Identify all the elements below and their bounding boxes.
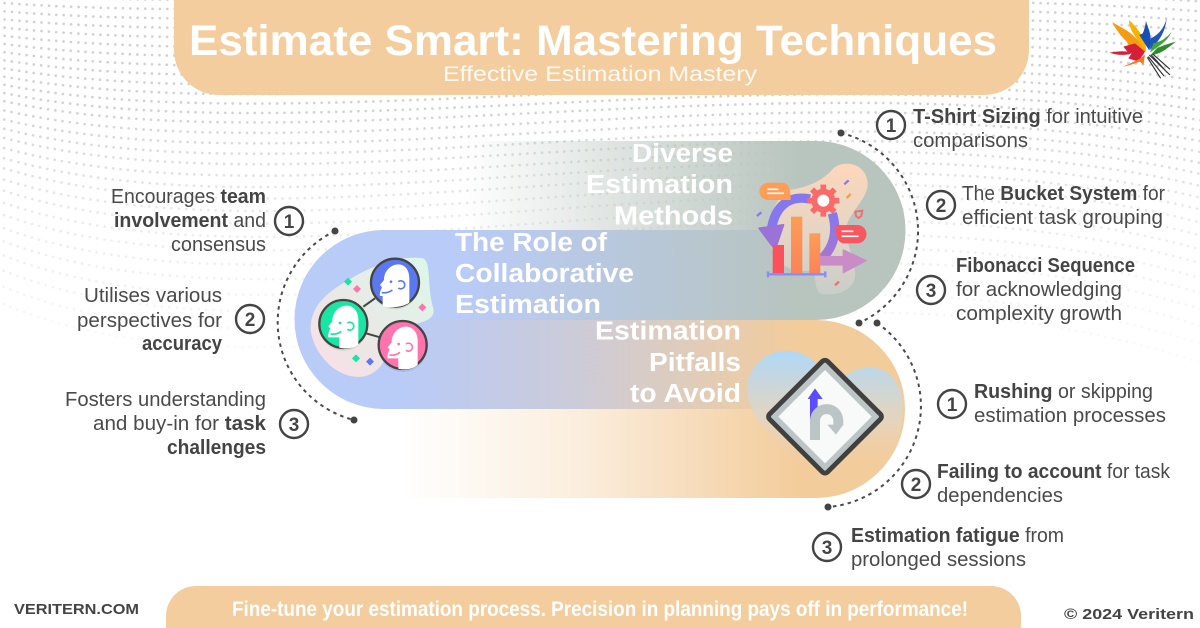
list item: buy-in <box>65 389 308 459</box>
icon: estimation methods chart <box>757 164 868 294</box>
list item: rushing: 1 <box>947 395 958 416</box>
heading: diverse estimation methods <box>586 140 733 230</box>
list item: buy-in: and buy-in for task <box>93 413 267 435</box>
header banner <box>174 0 1029 95</box>
heading: estimation pitfalls to avoid <box>595 318 741 408</box>
heading: diverse estimation methods: Methods <box>614 202 733 230</box>
list item: estimation fatigue: Estimation fatigue from <box>851 525 1064 547</box>
heading: role of collaborative estimation: Collaborative <box>455 260 634 288</box>
circular arrow right <box>821 213 835 260</box>
list item: team involvement: consensus <box>171 234 266 256</box>
subtitle: Effective Estimation Mastery <box>443 62 757 86</box>
dotted arc: collaboration <box>278 228 358 424</box>
list item: fibonacci sequence: 3 <box>926 281 936 302</box>
list item: accuracy: accuracy <box>142 333 223 355</box>
list item: estimation fatigue: 3 <box>822 538 832 559</box>
sign <box>772 364 878 469</box>
list item: fibonacci sequence <box>917 255 1135 325</box>
heading: diverse estimation methods: Estimation <box>586 171 733 199</box>
list item: rushing <box>938 381 1166 427</box>
list item: rushing: estimation processes <box>974 405 1166 427</box>
list item: failing to account: Failing to account for task <box>937 461 1171 483</box>
list item: bucket system: The Bucket System for <box>962 183 1165 205</box>
heading: role of collaborative estimation: The Role of <box>455 229 608 257</box>
list item: team involvement <box>111 186 303 256</box>
list item: fibonacci sequence: complexity growth <box>956 303 1122 325</box>
list item: rushing: Rushing or skipping <box>974 381 1153 403</box>
speech bubble orange <box>759 183 791 200</box>
list item: estimation fatigue <box>813 525 1064 571</box>
sparkles <box>344 278 360 362</box>
footer site name: VERITERN.COM <box>14 601 139 618</box>
list item: buy-in: challenges <box>167 437 266 459</box>
gear <box>807 185 839 217</box>
footer banner: Fine-tune your estimation process. Precision in planning pays off in performance! <box>232 598 968 621</box>
dotted arc: methods <box>838 130 918 326</box>
icon blob <box>769 164 868 294</box>
list item: bucket system: efficient task grouping <box>962 207 1163 229</box>
list item: accuracy: 2 <box>245 310 255 331</box>
list item: failing to account: dependencies <box>937 485 1063 507</box>
footer banner <box>166 586 1021 628</box>
heading: estimation pitfalls to avoid: Estimation <box>595 318 741 346</box>
heading: diverse estimation methods: Diverse <box>632 140 733 168</box>
heading: estimation pitfalls to avoid: to Avoid <box>630 380 741 408</box>
circular arrow left <box>771 198 810 230</box>
icon: logo burst <box>1109 18 1176 78</box>
footer copyright: © 2024 Veritern <box>1064 606 1194 623</box>
icon: road sign with clouds <box>747 351 903 477</box>
list item: failing to account: 2 <box>911 475 921 496</box>
list item: t-shirt sizing <box>877 106 1143 152</box>
band: estimation pitfalls <box>400 320 905 498</box>
list item: bucket system <box>927 183 1165 229</box>
pink arrow <box>821 250 866 273</box>
band: collaborative estimation <box>294 230 800 409</box>
band: diverse estimation methods <box>460 141 906 320</box>
list item: buy-in: Fosters understanding <box>65 389 266 411</box>
list item: team involvement: Encourages team <box>111 186 266 208</box>
heading: role of collaborative estimation <box>455 229 634 319</box>
list item: accuracy <box>77 285 264 355</box>
clouds <box>747 351 903 477</box>
list item: accuracy: Utilises various <box>84 285 222 307</box>
person blue <box>371 259 419 310</box>
list item: fibonacci sequence: for acknowledging <box>956 279 1122 301</box>
title: Estimate Smart: Mastering Techniques <box>189 17 997 65</box>
background dot pattern <box>2 0 1200 317</box>
purple arrow <box>808 388 823 420</box>
list item: t-shirt sizing: 1 <box>886 116 897 137</box>
heading: estimation pitfalls to avoid: Pitfalls <box>649 349 741 377</box>
list item: bucket system: 2 <box>936 196 946 217</box>
u-turn arrow <box>815 409 838 440</box>
list item: team involvement: 1 <box>284 212 295 233</box>
list item: t-shirt sizing: comparisons <box>913 130 1028 152</box>
list item: fibonacci sequence: Fibonacci Sequence <box>956 255 1135 277</box>
person pink <box>379 321 427 372</box>
dotted arc: pitfalls <box>824 320 921 510</box>
icon blob <box>311 258 434 377</box>
list item: estimation fatigue: prolonged sessions <box>851 549 1026 571</box>
list item: t-shirt sizing: T-Shirt Sizing for intuitive <box>913 106 1143 128</box>
speech bubble red <box>836 225 866 243</box>
person green <box>319 300 367 351</box>
list item: failing to account <box>902 461 1171 507</box>
icon: collaborative people network <box>311 258 434 377</box>
bars <box>773 245 784 273</box>
heading: role of collaborative estimation: Estimation <box>455 291 601 319</box>
list item: team involvement: involvement and <box>114 210 266 232</box>
list item: accuracy: perspectives for <box>77 310 222 332</box>
list item: buy-in: 3 <box>289 415 299 436</box>
